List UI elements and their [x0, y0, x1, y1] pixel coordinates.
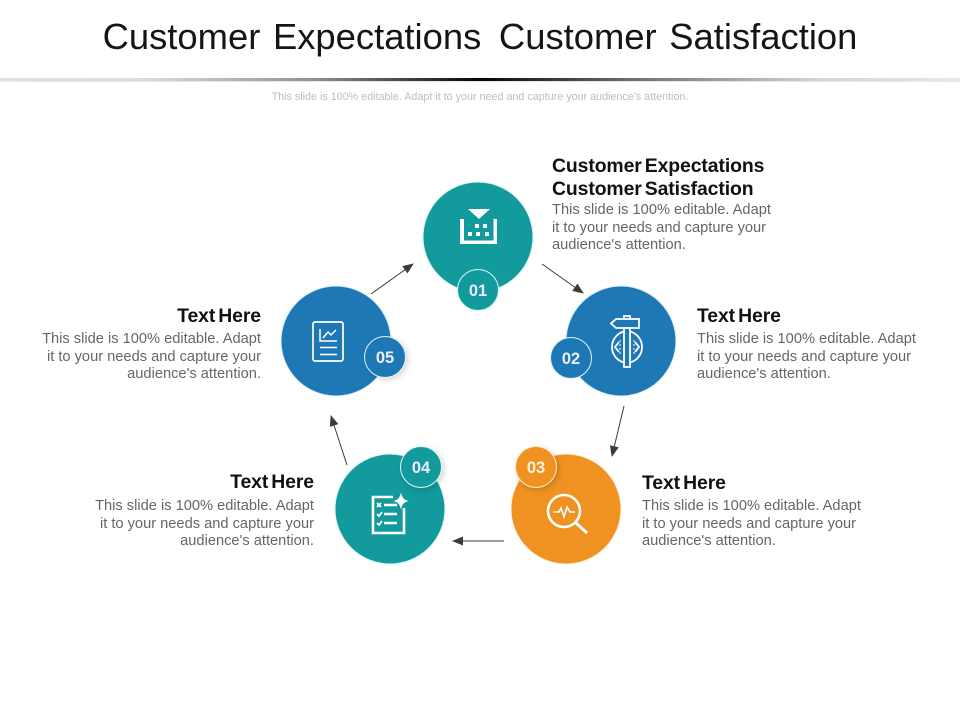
text block: step 01: Customer Satisfaction	[552, 178, 754, 200]
text block: step 03: audience's attention.	[642, 533, 776, 549]
text block: step 05	[42, 305, 261, 382]
arrow: 01 to 02	[542, 264, 583, 293]
badge 01: 01	[469, 282, 487, 300]
text block: step 01: This slide is 100% editable. Adapt	[552, 202, 771, 218]
node 02	[550, 286, 676, 396]
icon: checklist with sparkle	[373, 492, 409, 533]
text block: step 01: Customer Expectations	[552, 155, 764, 177]
text block: step 02: audience's attention.	[697, 366, 831, 382]
text block: step 05: This slide is 100% editable. Adapt	[42, 331, 261, 347]
text block: step 04: audience's attention.	[180, 533, 314, 549]
badge 04: 04	[412, 459, 431, 477]
text block: step 03: it to your needs and capture your	[642, 516, 856, 532]
node 04	[335, 446, 445, 564]
text block: step 04	[95, 471, 314, 549]
text block: step 01	[552, 155, 771, 253]
header rule	[0, 78, 960, 82]
text block: step 03: Text Here	[642, 472, 726, 494]
text block: step 04: it to your needs and capture your	[100, 516, 314, 532]
node 05	[281, 286, 406, 396]
node 03	[511, 446, 621, 564]
arrow: 02 to 03	[612, 406, 624, 456]
badge 02: 02	[562, 350, 580, 368]
subtitle: This slide is 100% editable. Adapt it to your need and capture your audience's attention.	[272, 91, 688, 103]
text block: step 02: This slide is 100% editable. Adapt	[697, 331, 916, 347]
arrow: 05 to 01	[371, 264, 413, 294]
icon: funnel into tray	[460, 209, 497, 244]
text block: step 05: it to your needs and capture your	[47, 349, 261, 365]
text block: step 04: This slide is 100% editable. Adapt	[95, 498, 314, 514]
arrow: 03 to 04	[453, 540, 504, 542]
text block: step 02: Text Here	[697, 305, 781, 327]
text block: step 03: This slide is 100% editable. Adapt	[642, 498, 861, 514]
arrow: 04 to 05	[331, 416, 347, 465]
badge 03: 03	[527, 459, 545, 477]
text block: step 03	[642, 472, 861, 549]
icon: signpost with compass	[611, 316, 642, 367]
text block: step 01: it to your needs and capture your	[552, 220, 766, 236]
text block: step 01: audience's attention.	[552, 237, 686, 253]
text block: step 02	[697, 305, 916, 382]
text block: step 05: Text Here	[177, 305, 261, 327]
text block: step 02: it to your needs and capture your	[697, 349, 911, 365]
text block: step 05: audience's attention.	[127, 366, 261, 382]
node 01	[423, 182, 533, 310]
icon: report with chart	[313, 322, 343, 361]
badge 05: 05	[376, 349, 394, 367]
icon: magnifier with pulse	[548, 495, 587, 533]
title: Customer Expectations Customer Satisfaction	[103, 16, 857, 57]
text block: step 04: Text Here	[230, 471, 314, 493]
